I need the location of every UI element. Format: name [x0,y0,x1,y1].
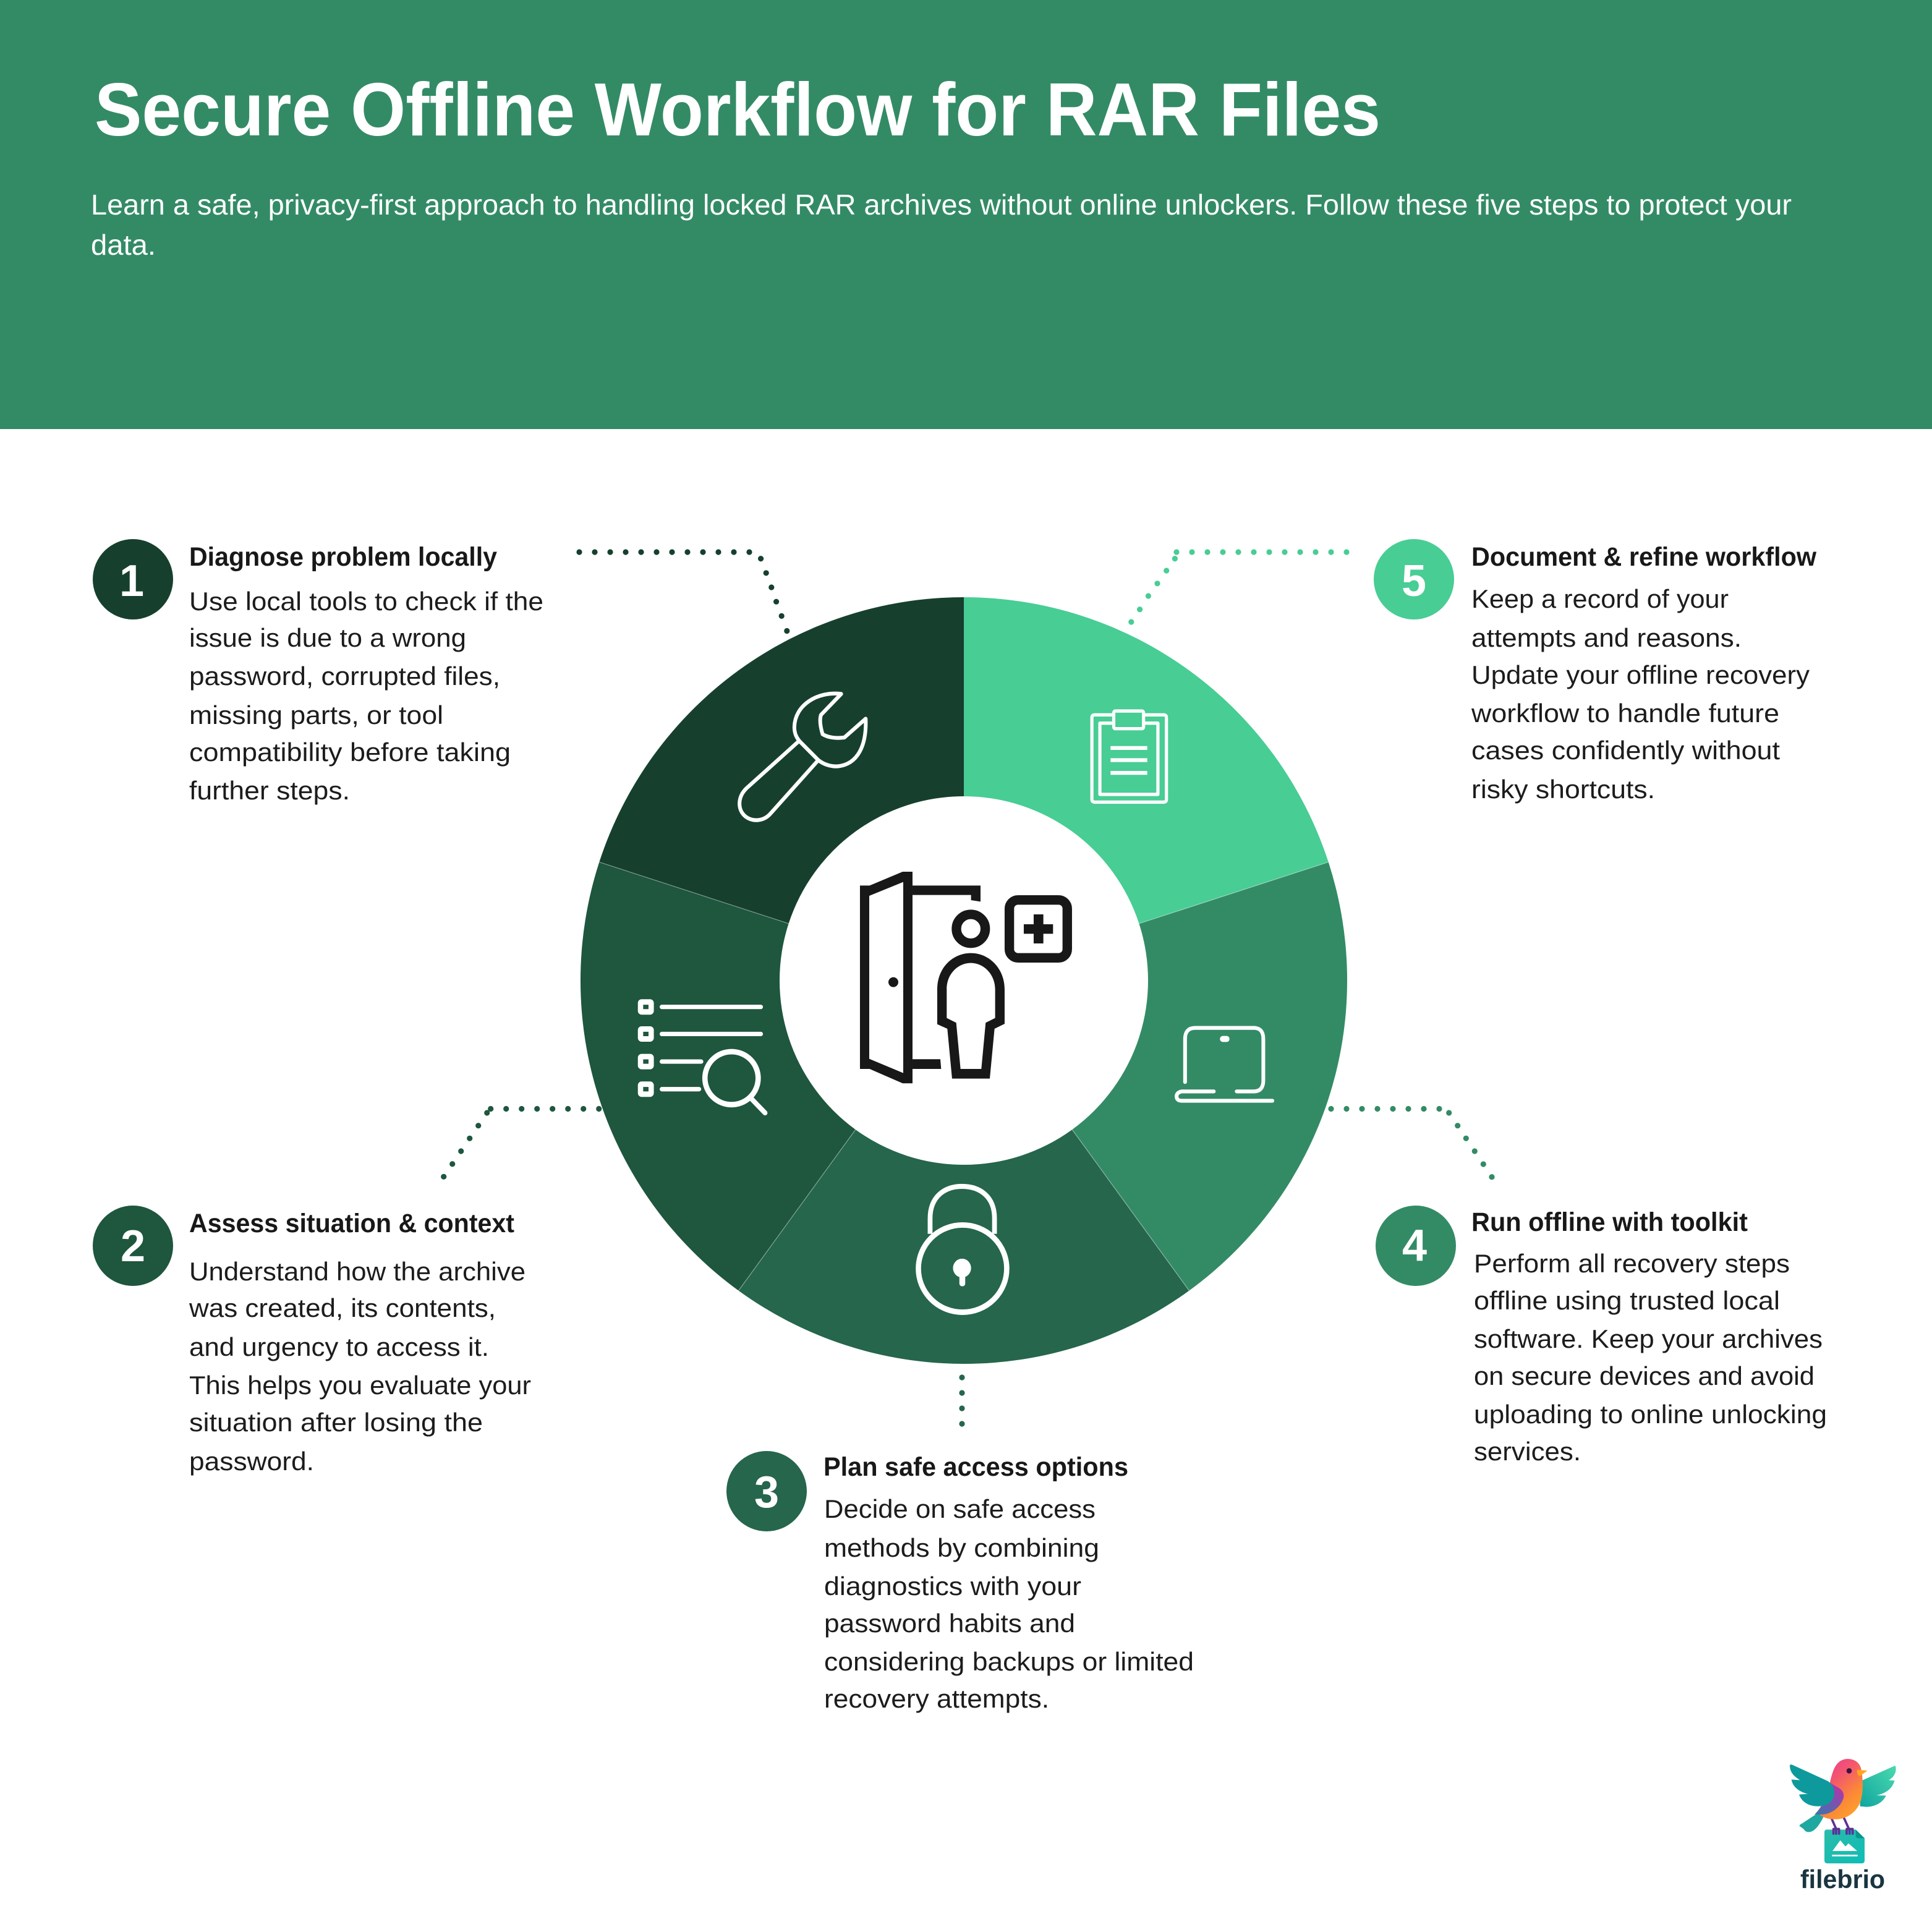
body 5: attempts and reasons. [1471,623,1742,652]
body 5: risky shortcuts. [1471,775,1655,804]
segment 2 [581,862,856,1291]
body 3: password habits and [824,1609,1075,1638]
body 5 [1471,584,1810,804]
file [1824,1829,1865,1863]
connector: step 5 [1128,549,1350,625]
body 3: recovery attempts. [824,1684,1049,1713]
heading 4: Run offline with toolkit [1471,1207,1748,1237]
body 4: services. [1474,1437,1581,1466]
body 5: cases confidently without [1471,736,1780,765]
heading 5: Document & refine workflow [1471,542,1817,572]
icon: clipboard [1092,711,1167,802]
badge 2 [93,1206,173,1286]
body 5: Update your offline recovery [1471,660,1810,689]
body 2: was created, its contents, [189,1293,496,1322]
body 2: and urgency to access it. [189,1332,489,1361]
connector: step 3 [959,1374,965,1427]
body 4: uploading to online unlocking [1474,1400,1827,1429]
badge 5: 5 [1402,556,1426,606]
body 4 [1474,1249,1827,1466]
logo: filebrio bird holding file [1790,1759,1896,1894]
badge 2: 2 [121,1222,145,1271]
badge 1 [93,539,173,619]
body 5: workflow to handle future [1471,699,1779,728]
body 2: Understand how the archive [189,1257,526,1286]
donut chart: five workflow segments [581,597,1347,1364]
icon: laptop [1177,1028,1272,1101]
badge 1: 1 [119,556,144,606]
chest shade [1815,1782,1844,1815]
body 2: password. [189,1447,314,1476]
badge 4: 4 [1402,1221,1427,1270]
body 1 [189,587,543,805]
body 5: Keep a record of your [1471,584,1729,613]
connector: step 4 [1328,1106,1495,1180]
body 3: methods by combining [824,1533,1099,1562]
step 3 [726,1451,1194,1713]
body 4: on secure devices and avoid [1474,1361,1815,1390]
body [1815,1759,1863,1819]
body 3 [824,1494,1194,1713]
body 1: issue is due to a wrong [189,623,466,652]
segment 5 [964,597,1329,924]
title: Secure Offline Workflow for RAR Files [95,67,1381,151]
segment 4 [1072,862,1347,1291]
icon: wrench [739,694,866,820]
body 1: password, corrupted files, [189,662,500,691]
legs [1832,1818,1853,1834]
badge 3 [726,1451,807,1531]
step 1 [93,539,543,805]
body 3: Decide on safe access [824,1494,1096,1523]
heading 1: Diagnose problem locally [189,542,497,572]
step 5 [1374,539,1817,804]
segment 3 [739,1130,1189,1364]
tail [1799,1814,1824,1832]
heading 3: Plan safe access options [823,1452,1128,1482]
step 4 [1376,1206,1827,1466]
icon: checklist with magnifier [640,1002,765,1113]
wordmark: filebrio [1800,1865,1885,1894]
badge 4 [1376,1206,1456,1286]
body 4: Perform all recovery steps [1474,1249,1790,1278]
body 1: further steps. [189,776,350,805]
body 3: diagnostics with your [824,1572,1081,1601]
body 1: missing parts, or tool [189,700,443,730]
step 2 [93,1206,531,1476]
body 2 [189,1257,531,1476]
heading 2: Assess situation & context [189,1209,514,1238]
segment 1 [599,597,964,924]
subtitle: Learn a safe, privacy-first approach to handling locked RAR archives without online unlockers. Follow these five steps to protect your [91,189,1792,221]
left wing [1790,1764,1834,1806]
body 2: situation after losing the [189,1408,483,1437]
body 4: offline using trusted local [1474,1286,1780,1315]
connector: step 1 [576,549,789,634]
body 3: considering backups or limited [824,1647,1194,1676]
badge 5 [1374,539,1454,619]
eye [1847,1768,1852,1774]
beak [1857,1770,1868,1776]
body 4: software. Keep your archives [1474,1324,1823,1353]
body 2: This helps you evaluate your [189,1371,531,1400]
subtitle: data. [91,229,156,261]
subtitle [91,189,1792,261]
right wing [1860,1766,1896,1807]
icon: padlock [918,1186,1006,1313]
body 1: compatibility before taking [189,738,511,767]
badge 3: 3 [754,1468,779,1517]
connector: step 2 [441,1106,602,1180]
icon: person at open door with medical badge [860,872,1067,1083]
body 1: Use local tools to check if the [189,587,543,616]
header banner [0,0,1932,429]
